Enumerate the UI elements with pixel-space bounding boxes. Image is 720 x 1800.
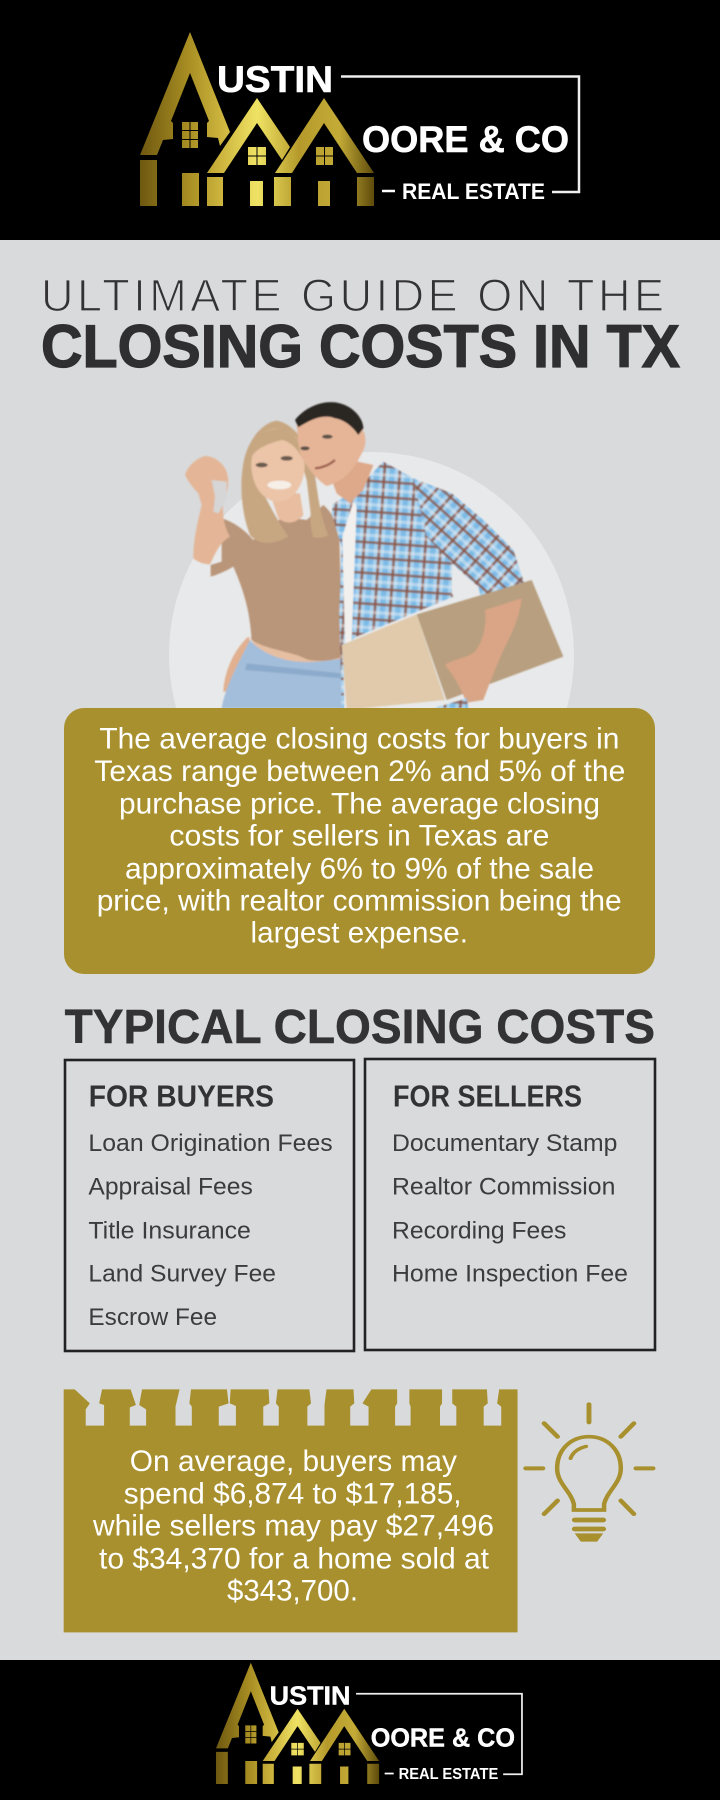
- heading: Typical Closing Costs: TYPICAL CLOSING COSTS: [65, 1001, 655, 1054]
- panel: for sellers: Recording Fees: [392, 1217, 566, 1244]
- callout: torn paper with example costs: [64, 1389, 518, 1632]
- logo: Austin Moore & Co header: REAL ESTATE: [402, 179, 545, 204]
- callout: torn paper with example costs: $343,700.: [227, 1575, 358, 1608]
- logo: Austin Moore & Co footer: USTIN: [270, 1683, 351, 1711]
- header band: [0, 0, 720, 240]
- callout: average closing costs: largest expense.: [250, 917, 468, 950]
- panel: for sellers: Home Inspection Fee: [392, 1261, 628, 1288]
- callout: average closing costs: The average closing costs for buyers in: [99, 722, 619, 755]
- callout: average closing costs: Texas range between 2% and 5% of the: [94, 755, 625, 788]
- panel: for buyers: Appraisal Fees: [88, 1173, 253, 1200]
- panel: for sellers: Realtor Commission: [392, 1173, 615, 1200]
- logo: Austin Moore & Co footer: REAL ESTATE: [399, 1766, 498, 1783]
- panel: for buyers: [65, 1060, 354, 1351]
- photo: couple holding house keys and a box: [169, 401, 574, 708]
- icon: light bulb: [526, 1404, 653, 1542]
- callout: average closing costs: [64, 708, 655, 974]
- callout: torn paper with example costs: spend $6,874 to $17,185,: [124, 1477, 462, 1510]
- title: CLOSING COSTS IN TX: [41, 313, 680, 380]
- callout: average closing costs: price, with realtor commission being the: [97, 885, 622, 918]
- heading: for sellers: FOR SELLERS: [393, 1079, 582, 1114]
- callout: torn paper with example costs: to $34,370 for a home sold at: [99, 1542, 490, 1575]
- logo: Austin Moore & Co header: [140, 32, 579, 206]
- callout: average closing costs: approximately 6% to 9% of the sale: [125, 852, 594, 885]
- logo: Austin Moore & Co header: OORE & CO: [362, 119, 569, 160]
- panel: for sellers: Documentary Stamp: [392, 1130, 617, 1157]
- logo: Austin Moore & Co footer: OORE & CO: [371, 1724, 515, 1752]
- heading: for buyers: FOR BUYERS: [89, 1079, 274, 1114]
- callout: average closing costs: costs for sellers in Texas are: [169, 820, 549, 853]
- panel: for buyers: Land Survey Fee: [88, 1261, 276, 1288]
- footer band: [0, 1660, 720, 1800]
- callout: average closing costs: purchase price. The average closing: [119, 787, 600, 820]
- callout: torn paper with example costs: while sellers may pay $27,496: [92, 1510, 494, 1543]
- panel: for buyers: Loan Origination Fees: [88, 1130, 333, 1157]
- man's hand around waist: [223, 637, 252, 692]
- panel: for buyers: Escrow Fee: [88, 1304, 217, 1331]
- callout: torn paper with example costs: On average, buyers may: [130, 1445, 457, 1478]
- title line: Ultimate Guide on the: ULTIMATE GUIDE ON THE: [41, 270, 664, 321]
- title: [41, 270, 680, 380]
- panel: for sellers: [365, 1059, 655, 1350]
- logo: Austin Moore & Co footer: [216, 1663, 522, 1784]
- panel: for buyers: Title Insurance: [88, 1217, 251, 1244]
- logo: Austin Moore & Co header: USTIN: [217, 59, 333, 100]
